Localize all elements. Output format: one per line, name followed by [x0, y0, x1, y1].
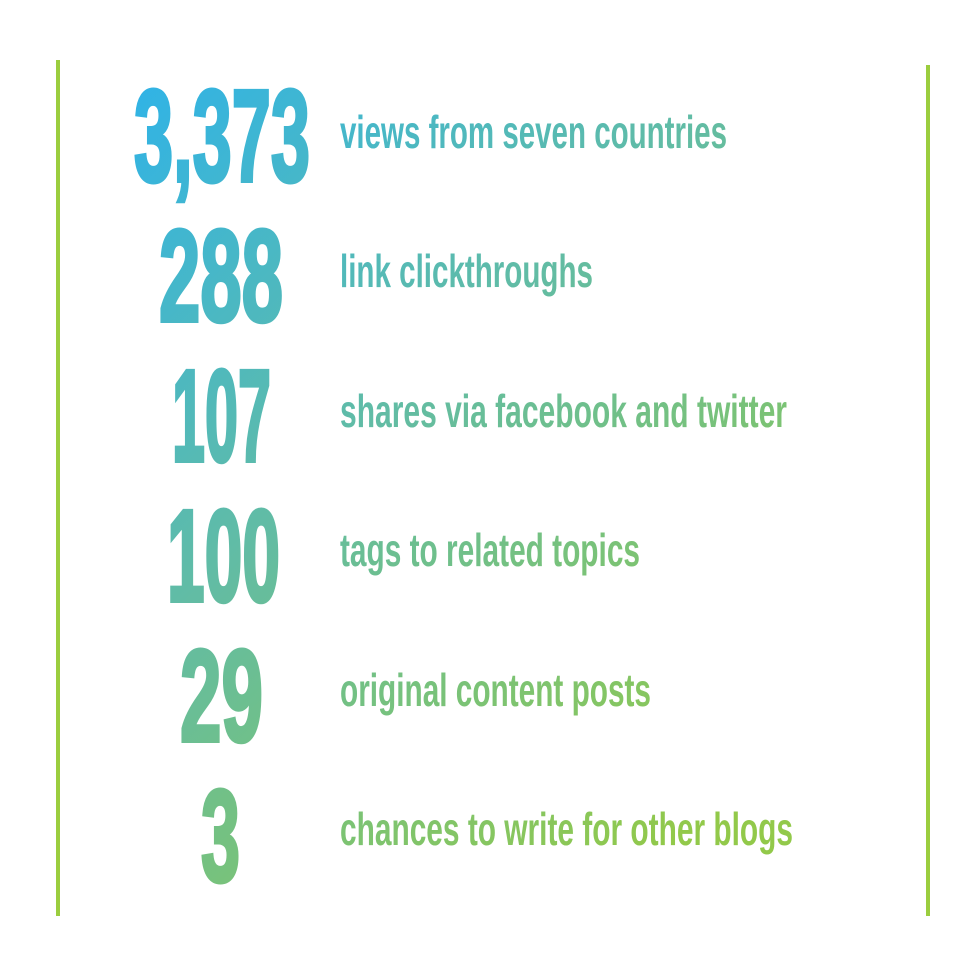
- stat: guest blogs: 3: [201, 762, 240, 909]
- stat: views: [134, 62, 727, 209]
- stat: clickthroughs: 288: [159, 202, 283, 349]
- stat: posts: 29: [180, 622, 263, 769]
- stat: tags: [167, 482, 640, 629]
- stat: posts: [180, 622, 651, 769]
- stat: tags: tags to related topics: [340, 524, 640, 576]
- stat: guest blogs: [201, 762, 793, 909]
- stat: posts: original content posts: [340, 664, 651, 716]
- stat: views: 3,373: [134, 62, 310, 209]
- stat: tags: 100: [167, 482, 280, 629]
- stat: shares: 107: [172, 342, 271, 489]
- stat: clickthroughs: link clickthroughs: [340, 245, 593, 297]
- stat: views: views from seven countries: [340, 106, 727, 158]
- left border line: [56, 60, 60, 916]
- stat: clickthroughs: [159, 202, 593, 349]
- right border line: [926, 65, 930, 916]
- stat: shares: [172, 342, 787, 489]
